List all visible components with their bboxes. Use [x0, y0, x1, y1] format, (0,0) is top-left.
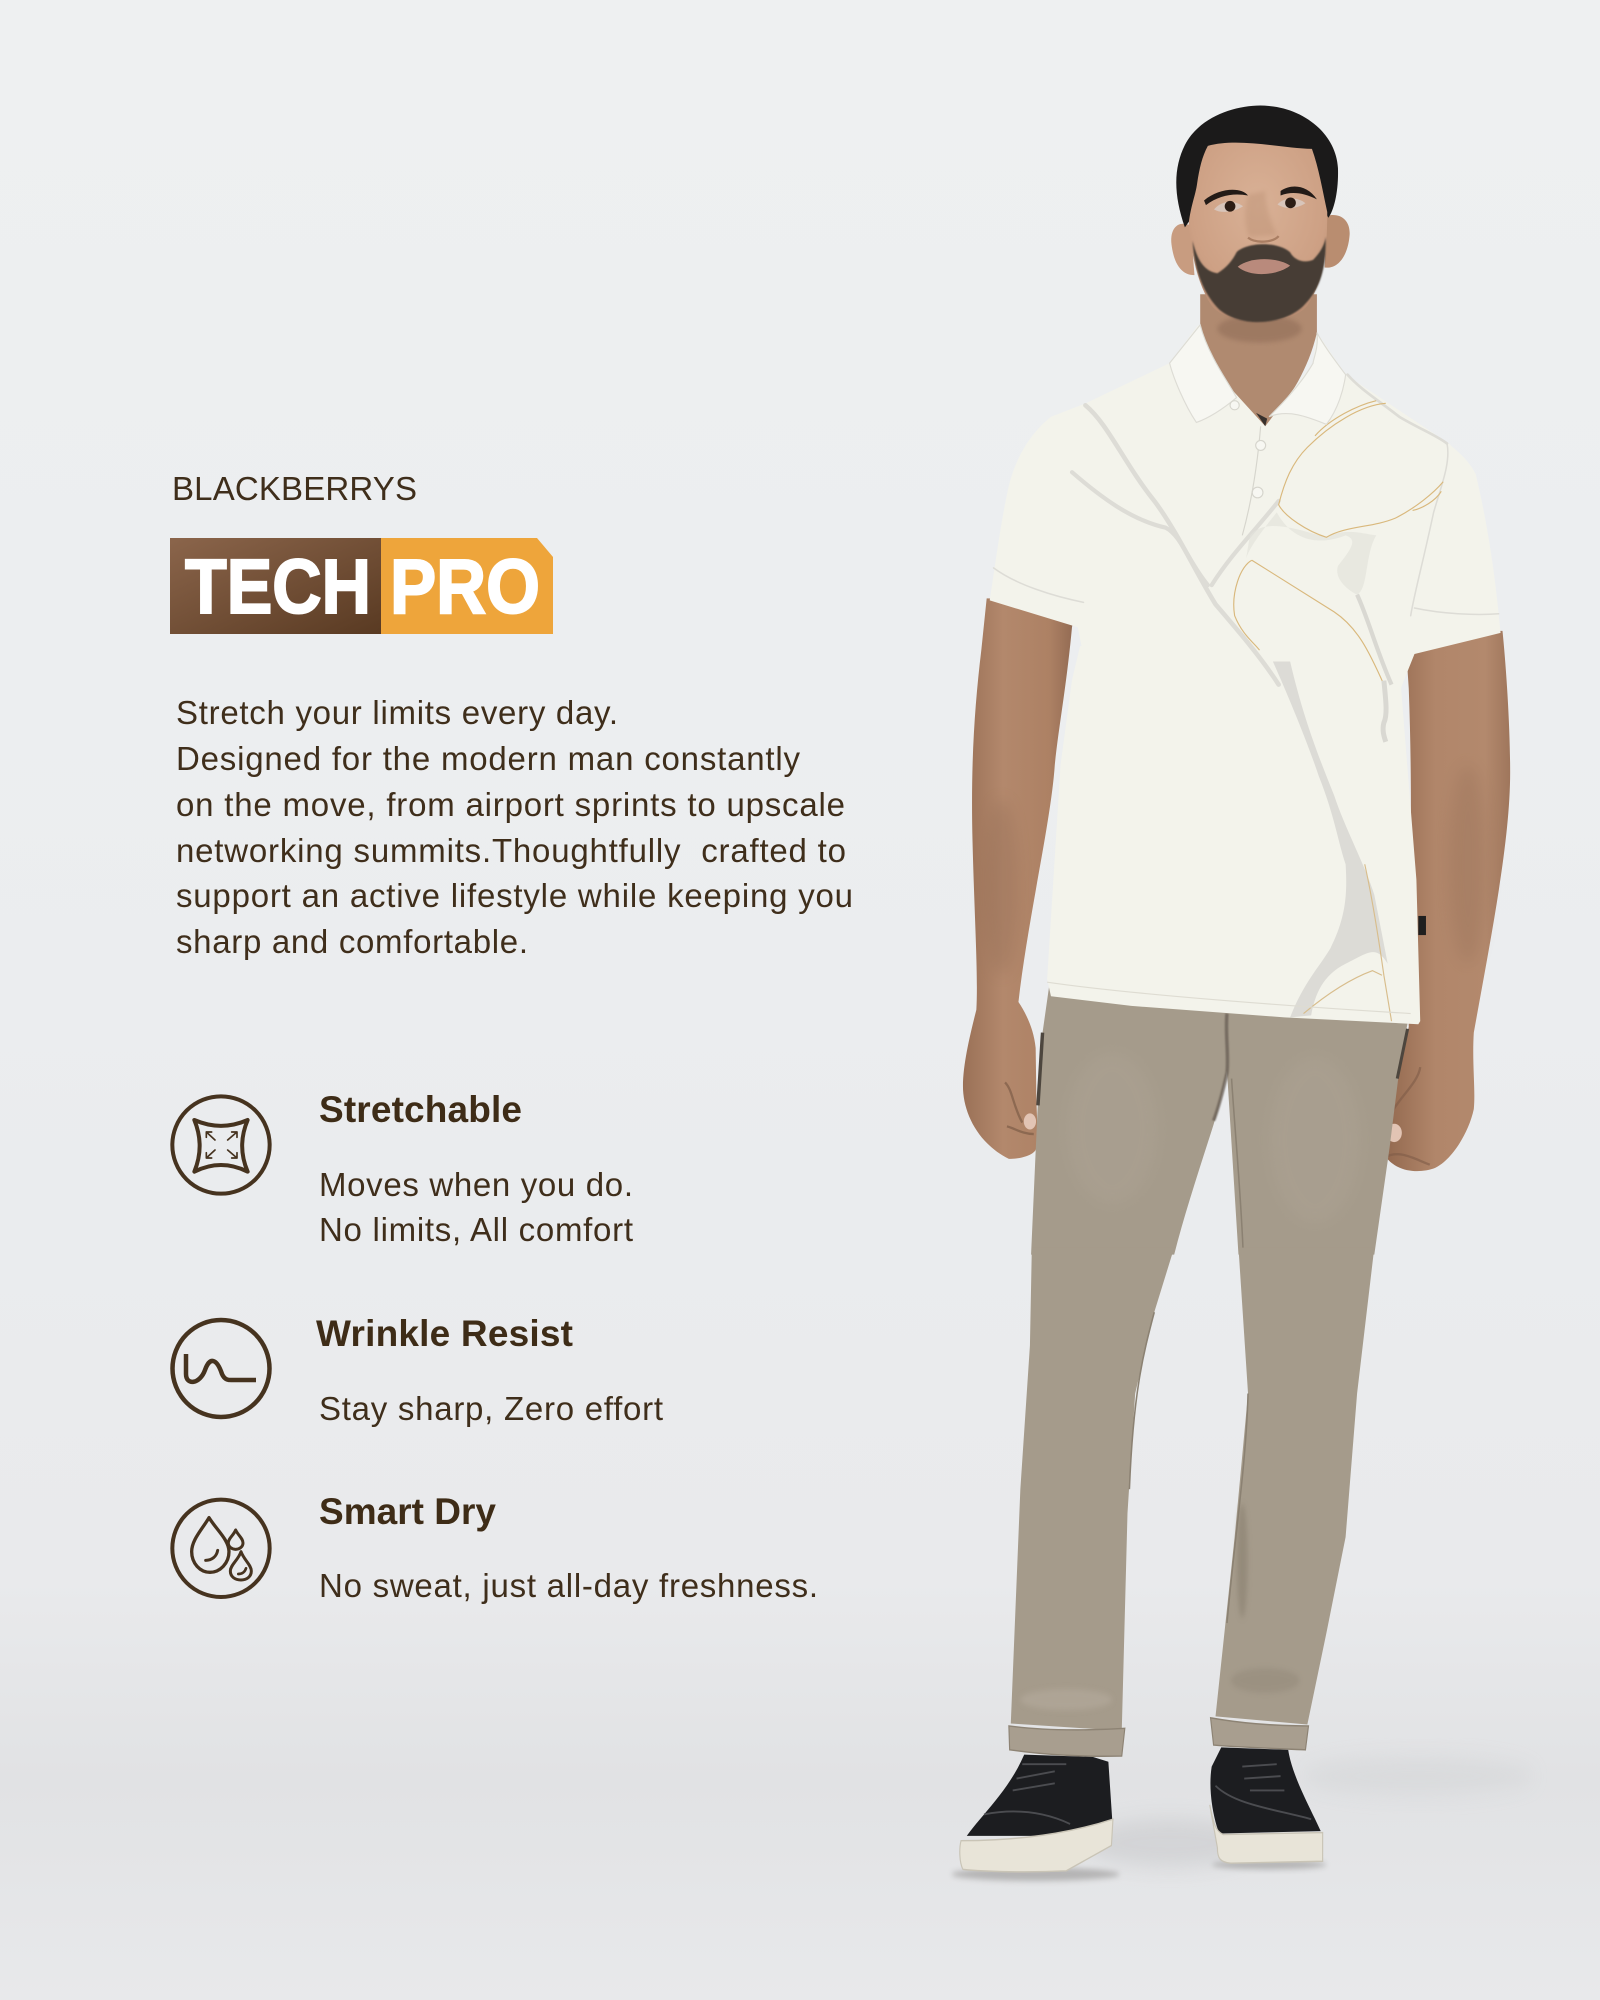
shoes — [960, 1747, 1323, 1872]
head and neck — [1171, 106, 1350, 426]
text: No limits, All comfort — [319, 1211, 633, 1248]
left shoe — [960, 1755, 1113, 1872]
description paragraph: networking summits.Thoughtfully crafted to — [176, 832, 846, 869]
heading: Smart Dry — [319, 1491, 496, 1532]
polo shirt — [990, 325, 1501, 1024]
text: Moves when you do. — [319, 1166, 633, 1203]
trousers — [1009, 987, 1409, 1756]
shirt upper — [990, 325, 1501, 685]
shirt lower — [1047, 646, 1420, 1024]
hair back — [1176, 106, 1338, 227]
logo: Tech Pro badge: TECH — [185, 544, 371, 630]
arms and hands — [963, 598, 1510, 1171]
panel: features — [172, 1089, 818, 1604]
right shoe — [1210, 1747, 1323, 1863]
logo: Tech Pro badge — [170, 538, 553, 634]
logo: Tech Pro badge: PRO — [390, 544, 540, 630]
description paragraph: Designed for the modern man constantly — [176, 740, 800, 777]
description paragraph: sharp and comfortable. — [176, 923, 528, 960]
lips — [1238, 259, 1290, 274]
heading: Wrinkle Resist — [316, 1313, 573, 1354]
brand name: BLACKBERRYS — [172, 470, 417, 507]
icon: stretch fabric — [172, 1096, 270, 1194]
description paragraph: support an active lifestyle while keeping you — [176, 877, 853, 914]
icon: wrinkle line — [172, 1320, 270, 1417]
text — [319, 1166, 633, 1248]
print: gold lines — [1234, 401, 1443, 685]
feature: wrinkle resist — [172, 1313, 663, 1427]
neck — [1200, 294, 1317, 426]
placket and buttons — [1230, 401, 1266, 535]
text: Stay sharp, Zero effort — [319, 1390, 663, 1427]
model photo illustration — [960, 106, 1510, 1872]
description paragraph: Stretch your limits every day. — [176, 694, 618, 731]
garment label — [1418, 916, 1426, 935]
icon: water drops — [172, 1500, 270, 1597]
description paragraph: on the move, from airport sprints to upscale — [176, 786, 845, 823]
feature: stretchable — [172, 1089, 633, 1248]
print: grey veins — [994, 375, 1499, 685]
text: No sweat, just all-day freshness. — [319, 1567, 818, 1604]
nose — [1248, 236, 1279, 242]
feature: smart dry — [172, 1491, 818, 1604]
collar — [1170, 325, 1346, 426]
ears — [1171, 224, 1194, 275]
face — [1189, 143, 1327, 322]
heading: Stretchable — [319, 1089, 522, 1130]
panel: brand and description — [170, 470, 853, 960]
floor shadows — [951, 1757, 1533, 1881]
print: lower band — [1273, 661, 1388, 1017]
beard — [1193, 237, 1326, 322]
description paragraph — [176, 694, 853, 960]
eyes — [1204, 187, 1317, 212]
